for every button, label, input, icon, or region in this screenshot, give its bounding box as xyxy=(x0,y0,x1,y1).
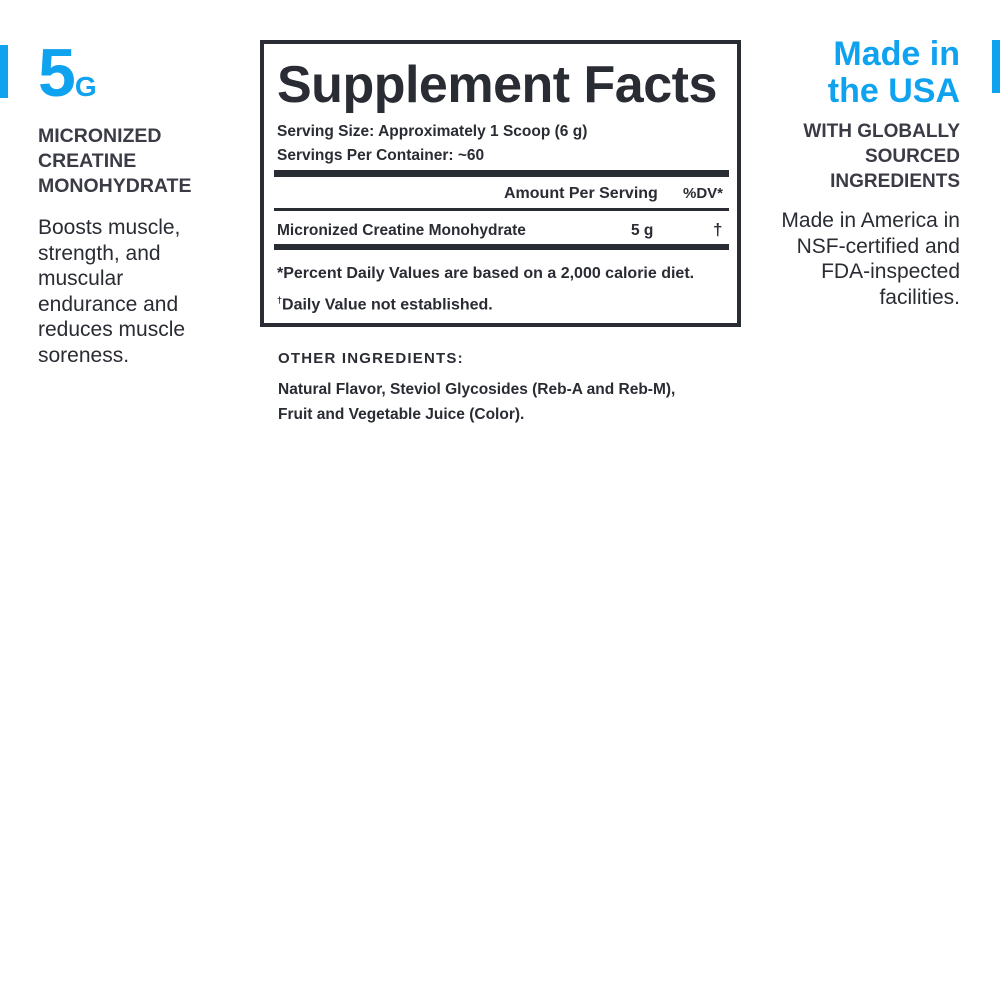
other ingredients text xyxy=(278,381,675,423)
description: soreness. xyxy=(38,344,129,366)
right column: made in USA xyxy=(781,35,960,308)
subheading: MONOHYDRATE xyxy=(38,175,191,197)
description: endurance and xyxy=(38,292,178,316)
subheading: WITH GLOBALLY xyxy=(803,121,960,142)
footnotes: †Daily Value not established. xyxy=(277,295,493,313)
subheading: CREATINE xyxy=(38,150,136,172)
accent bar left xyxy=(0,45,8,98)
subheading: INGREDIENTS xyxy=(830,171,960,192)
description: Boosts muscle, xyxy=(38,216,180,239)
description: Made in America in xyxy=(781,209,960,232)
panel: supplement facts: † xyxy=(713,220,722,239)
description: NSF-certified and xyxy=(797,234,960,258)
panel: supplement facts: 5 g xyxy=(631,222,653,239)
heading: the USA xyxy=(828,72,960,110)
ingredient row: Micronized Creatine Monohydrate xyxy=(277,222,526,239)
panel: supplement facts xyxy=(260,40,741,327)
heading: Made in xyxy=(833,35,960,73)
footnotes: *Percent Daily Values are based on a 2,000 calorie diet. xyxy=(277,265,694,282)
serving info xyxy=(277,123,587,164)
other ingredients text: Natural Flavor, Steviol Glycosides (Reb-A and Reb-M), xyxy=(278,381,675,398)
subheading: SOURCED xyxy=(865,146,960,167)
serving info: Servings Per Container: ~60 xyxy=(277,147,484,164)
title: Supplement Facts xyxy=(277,56,717,114)
description xyxy=(781,209,960,308)
description: muscular xyxy=(38,267,123,290)
heading xyxy=(828,35,960,110)
description: facilities. xyxy=(879,286,960,308)
column headers: Amount Per Serving xyxy=(504,185,658,202)
heading 5G: 5G xyxy=(38,35,96,111)
subheading xyxy=(803,121,960,192)
panel: supplement facts: %DV* xyxy=(683,185,723,202)
serving info: Serving Size: Approximately 1 Scoop (6 g) xyxy=(277,123,587,140)
accent bar right xyxy=(992,40,1000,93)
description: reduces muscle xyxy=(38,318,185,341)
footnotes xyxy=(277,265,694,313)
description xyxy=(38,216,185,366)
subheading: MICRONIZED xyxy=(38,125,162,147)
description: FDA-inspected xyxy=(821,260,960,283)
left column: 5g xyxy=(38,35,191,366)
other ingredients heading: OTHER INGREDIENTS: xyxy=(278,350,464,367)
description: strength, and xyxy=(38,242,161,264)
subheading xyxy=(38,125,191,197)
other ingredients text: Fruit and Vegetable Juice (Color). xyxy=(278,406,524,423)
other ingredients xyxy=(278,350,675,423)
